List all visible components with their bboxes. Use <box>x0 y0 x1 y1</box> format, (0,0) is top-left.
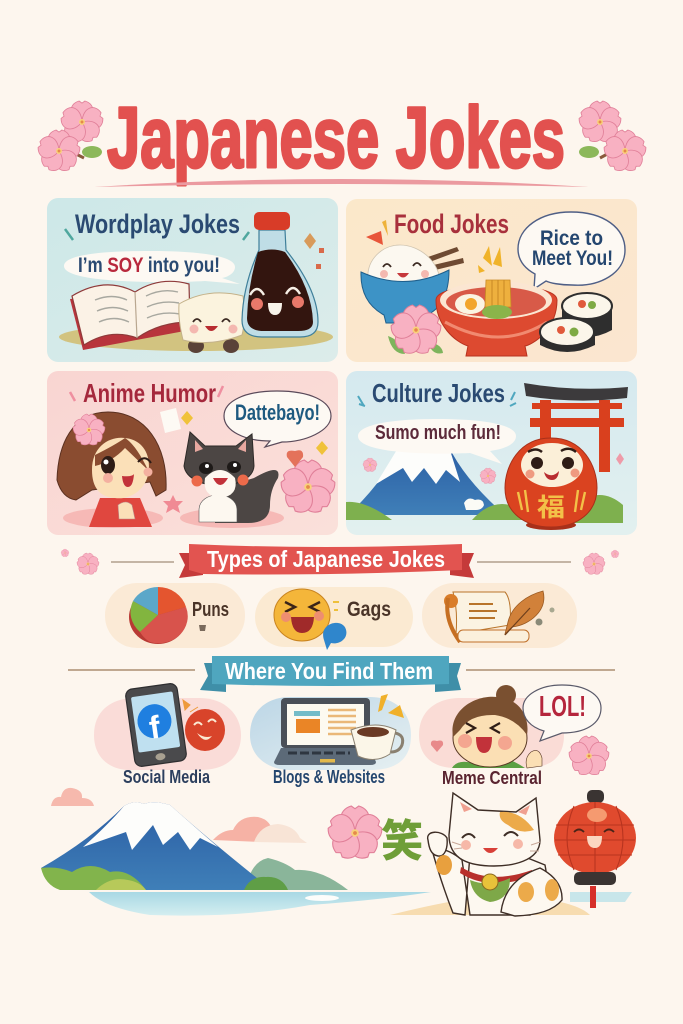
icon: ramen bowl <box>436 280 557 356</box>
snow cap <box>83 802 218 850</box>
panel: anime humor <box>47 371 338 535</box>
icon: Mount Fuji <box>346 446 530 520</box>
sparkles <box>65 229 324 269</box>
icon: rice bowl <box>361 245 464 323</box>
icon: laptop <box>274 698 376 765</box>
icon: phone with facebook logo: f <box>147 709 163 746</box>
icon: soy sauce bottle <box>242 212 318 337</box>
icon: cherry blossoms right <box>577 101 648 174</box>
speech bubble: Rice to Meet You <box>518 212 625 289</box>
icon: phone with facebook logo <box>125 683 187 767</box>
mountain <box>41 802 272 890</box>
panel: culture jokes <box>346 371 637 535</box>
ribbon <box>200 656 461 692</box>
ground <box>59 323 333 351</box>
section heading: where you find them: Where You Find Them <box>225 658 433 684</box>
pill: gags <box>255 587 413 650</box>
pill: puns: Puns <box>192 599 229 621</box>
icon: cherry blossoms left <box>36 101 105 174</box>
label: blogs and websites: Blogs & Websites <box>273 767 385 787</box>
speech bubble: Dattebayo: Dattebayo! <box>235 400 320 425</box>
speech bubble: Rice to Meet You: Rice to <box>540 227 603 250</box>
back hills <box>246 858 348 890</box>
icon: open book <box>70 281 190 350</box>
lake <box>89 892 431 916</box>
pill: gags: Gags <box>347 598 391 621</box>
panel: wordplay jokes <box>47 198 338 362</box>
title block <box>36 90 648 187</box>
icon: cherry blossom <box>325 806 385 863</box>
card: blogs and websites <box>250 694 411 787</box>
speech bubble: Sumo much fun: Sumo much fun! <box>375 422 501 444</box>
label: meme central: Meme Central <box>442 768 542 788</box>
panel: food jokes <box>346 199 637 362</box>
clouds <box>51 788 307 843</box>
decorations <box>70 386 338 517</box>
label: social media: Social Media <box>123 767 211 787</box>
icon: red laughing bubble <box>183 700 225 751</box>
sand <box>390 900 590 915</box>
heading: anime humor: Anime Humor <box>83 378 216 408</box>
heading: food jokes: Food Jokes <box>394 209 509 239</box>
section heading: where you find them <box>68 656 615 692</box>
icon: cherry blossom <box>567 736 611 778</box>
sparks <box>366 220 502 273</box>
icon: daruma: 福 <box>537 488 565 524</box>
icon: coffee cup <box>351 725 403 760</box>
icon: laughing emoji <box>274 589 346 650</box>
icon: tofu character <box>179 293 244 353</box>
small blossoms <box>358 392 624 485</box>
icon: anime girl <box>57 412 166 527</box>
hills <box>41 866 288 890</box>
speech bubble: Rice to Meet You: Meet You! <box>532 247 613 270</box>
speech bubble: I'm SOY into you: I’m SOY into you! <box>78 254 220 277</box>
section heading: types of Japanese jokes <box>61 544 619 578</box>
speech bubble: Dattebayo <box>224 391 331 447</box>
section heading: types of Japanese jokes: Types of Japanese Jokes <box>207 546 445 572</box>
icon: paper lantern <box>554 790 636 908</box>
icon: laughing boy <box>452 685 542 768</box>
speech bubble: I'm SOY into you <box>64 251 240 284</box>
icon: maneki-neko cat <box>428 793 562 916</box>
kanji: laugh: 笑 <box>381 805 423 869</box>
card: social media <box>94 683 241 787</box>
speech bubble: Sumo much fun <box>358 419 516 464</box>
title underline <box>94 179 589 187</box>
scene: lucky cat and lantern <box>325 790 636 916</box>
pill: stories <box>422 583 577 648</box>
icon: pie chart <box>129 587 188 644</box>
icon: cat <box>184 432 278 523</box>
scene: Mount Fuji landscape <box>41 788 431 916</box>
heading: wordplay jokes: Wordplay Jokes <box>75 209 240 239</box>
icon: scroll and quill <box>444 591 544 642</box>
speech bubble: LOL <box>523 685 601 741</box>
heading: culture jokes: Culture Jokes <box>372 378 505 408</box>
ground <box>63 508 163 528</box>
card: meme central <box>419 685 611 788</box>
icon: torii gate <box>524 383 628 472</box>
icon: sushi rolls <box>540 293 612 352</box>
icon: cherry blossom <box>388 305 444 358</box>
icon: daruma <box>505 438 623 530</box>
speech bubble: LOL: LOL! <box>539 691 586 723</box>
ribbon <box>179 544 474 578</box>
pill: puns <box>105 583 245 648</box>
